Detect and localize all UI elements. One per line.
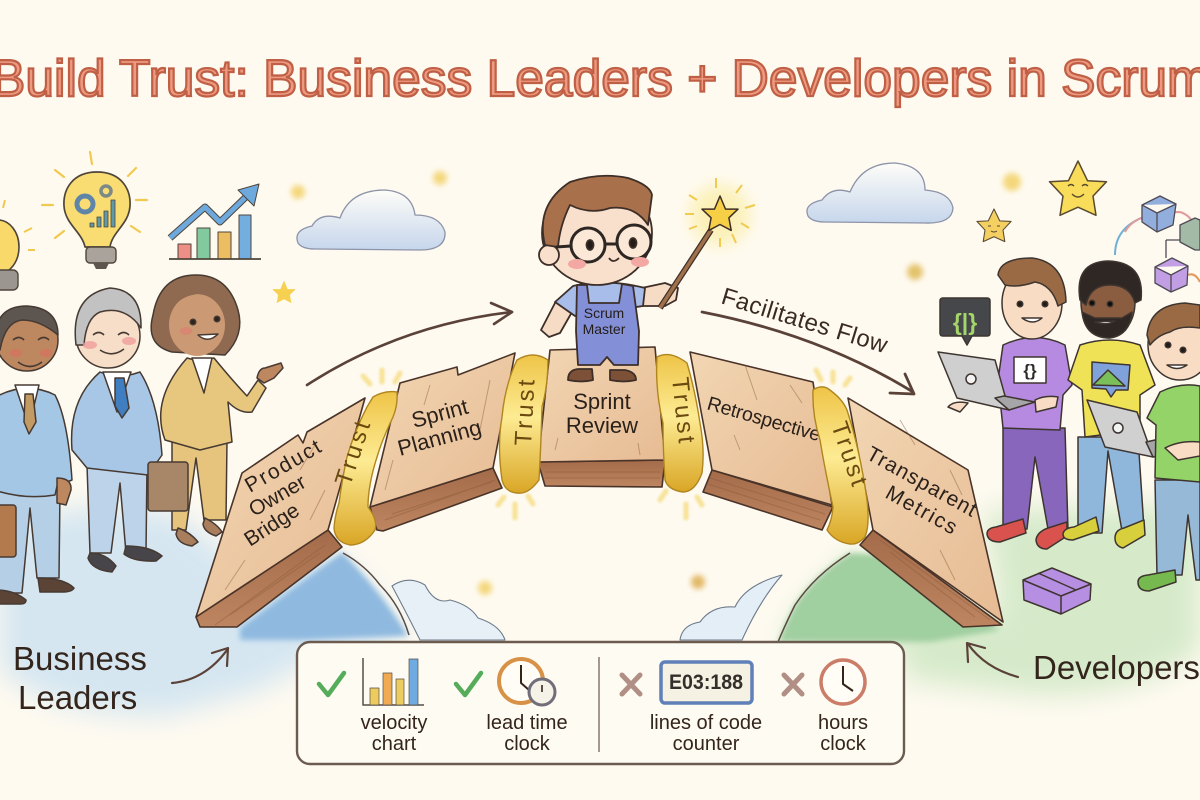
- label: developers: Developers: [1033, 649, 1200, 686]
- icon: growth bar chart: [169, 184, 261, 259]
- scrum master character: [539, 176, 755, 382]
- label: facilitates flow: Facilitates Flow: [718, 283, 891, 359]
- gold joint 4: [813, 387, 872, 544]
- metrics panel: [297, 642, 904, 764]
- cloud: lower right: [680, 575, 782, 640]
- cloud: upper left: [297, 190, 445, 250]
- icon: smiling large star: [1050, 161, 1106, 215]
- icon: hours clock: [821, 660, 865, 704]
- plank 4: retrospective: [690, 352, 833, 530]
- trust glow rays: [363, 370, 850, 518]
- icon: terminal speech bubble: {|}: [953, 309, 977, 335]
- label: lines of code counter: counter: [673, 733, 740, 755]
- label: lead time clock: [486, 712, 568, 755]
- person: developer in purple shirt: [938, 258, 1072, 549]
- icon: green check 2: [456, 673, 481, 695]
- label: velocity chart: chart: [372, 733, 417, 755]
- icon: partial light bulb: [0, 200, 35, 290]
- laptop: developer 1: [938, 352, 1058, 412]
- label: hours clock: clock: [820, 733, 867, 755]
- icon: lines of code counter: [661, 662, 752, 703]
- icon: small gold star: [272, 280, 296, 303]
- icon: lines of code counter: E03:188: [669, 671, 743, 694]
- facilitates flow arrow: [702, 312, 914, 394]
- plank 3: sprint review: Review: [566, 413, 638, 438]
- plank 5: transparent metrics: Transparent: [863, 442, 981, 522]
- glow dots: [291, 171, 1021, 595]
- label: velocity chart: velocity: [361, 712, 427, 734]
- person: developer in purple shirt: {}: [1023, 361, 1037, 380]
- icon: x mark 2: [784, 675, 802, 694]
- plank 5: transparent metrics: Metrics: [882, 481, 961, 539]
- plank 1: product owner bridge: Owner: [245, 470, 310, 521]
- scrum master arrow: [307, 303, 512, 385]
- label: lead time clock: clock: [504, 733, 551, 755]
- person: developer in green shirt: [1138, 303, 1200, 591]
- arrow: business leaders: [172, 648, 228, 683]
- arrow: developers: [967, 643, 1018, 677]
- plank 1: product owner bridge: Bridge: [240, 499, 304, 551]
- icon: x mark 1: [622, 675, 640, 694]
- ground: business leaders side: [0, 507, 410, 715]
- person: grey-haired leader with blue tie: [72, 288, 162, 572]
- person: briefcase: [148, 462, 188, 511]
- plank 2: sprint planning: [370, 353, 515, 531]
- title: Build Trust: Business Leaders + Developers in Scrum: [0, 50, 1200, 108]
- plank 2: sprint planning: Sprint: [409, 394, 471, 433]
- plank 2: sprint planning: Planning: [395, 415, 484, 461]
- person: leader with tan tie: [0, 306, 74, 604]
- divider: [598, 657, 600, 752]
- scrum master bib text: Master: [583, 321, 626, 337]
- icon: terminal speech bubble: [940, 298, 990, 345]
- magic wand: [660, 178, 755, 308]
- label: velocity chart: [361, 712, 427, 755]
- label: business leaders: [13, 640, 147, 716]
- gold joint 1: Trust: [330, 417, 376, 489]
- gold joint 2: [500, 355, 548, 493]
- gold joint 4: Trust: [825, 418, 872, 490]
- label: business leaders: Business: [13, 640, 147, 677]
- gold joint 1: [330, 392, 397, 545]
- gold joint 3: [657, 355, 703, 492]
- plank 3: sprint review: Sprint: [573, 389, 631, 414]
- developers group: [938, 258, 1200, 614]
- label: hours clock: [818, 712, 868, 755]
- plank 4: retrospective: Retrospective: [705, 393, 823, 446]
- icon: green check 1: [319, 673, 344, 695]
- gold joint 2: Trust: [510, 379, 540, 446]
- gold joint 3: Trust: [666, 376, 700, 445]
- cloud: upper right: [807, 163, 953, 223]
- label: hours clock: hours: [818, 712, 868, 734]
- plank 1: product owner bridge: Product: [241, 435, 325, 497]
- plank 3: sprint review: [538, 347, 665, 487]
- plank 1: product owner bridge: [196, 398, 365, 627]
- plank 5: transparent metrics: [848, 398, 1003, 627]
- icon: velocity chart: [363, 658, 424, 705]
- laptop: developer 2: [1087, 400, 1153, 457]
- icon: connected cubes: [1115, 196, 1200, 292]
- icon: light bulb with gears and chart: [42, 152, 147, 269]
- person: leader in gold suit: [151, 275, 283, 546]
- ground: developers side: [778, 505, 1200, 695]
- icon: smiling small star: [977, 209, 1011, 242]
- label: lines of code counter: lines of code: [650, 712, 762, 734]
- label: lines of code counter: [650, 712, 762, 755]
- icon: lead time clock: [499, 659, 555, 705]
- cloud: lower left: [392, 580, 505, 640]
- purple boxes: [1023, 568, 1091, 614]
- scrum master bib text: [583, 305, 626, 337]
- label: business leaders: Leaders: [18, 679, 137, 716]
- business leaders group: [0, 275, 283, 604]
- person: developer in yellow shirt: [1063, 261, 1185, 548]
- bridge: [196, 347, 1003, 627]
- scrum master bib text: Scrum: [584, 305, 624, 321]
- label: lead time clock: lead time: [486, 712, 568, 734]
